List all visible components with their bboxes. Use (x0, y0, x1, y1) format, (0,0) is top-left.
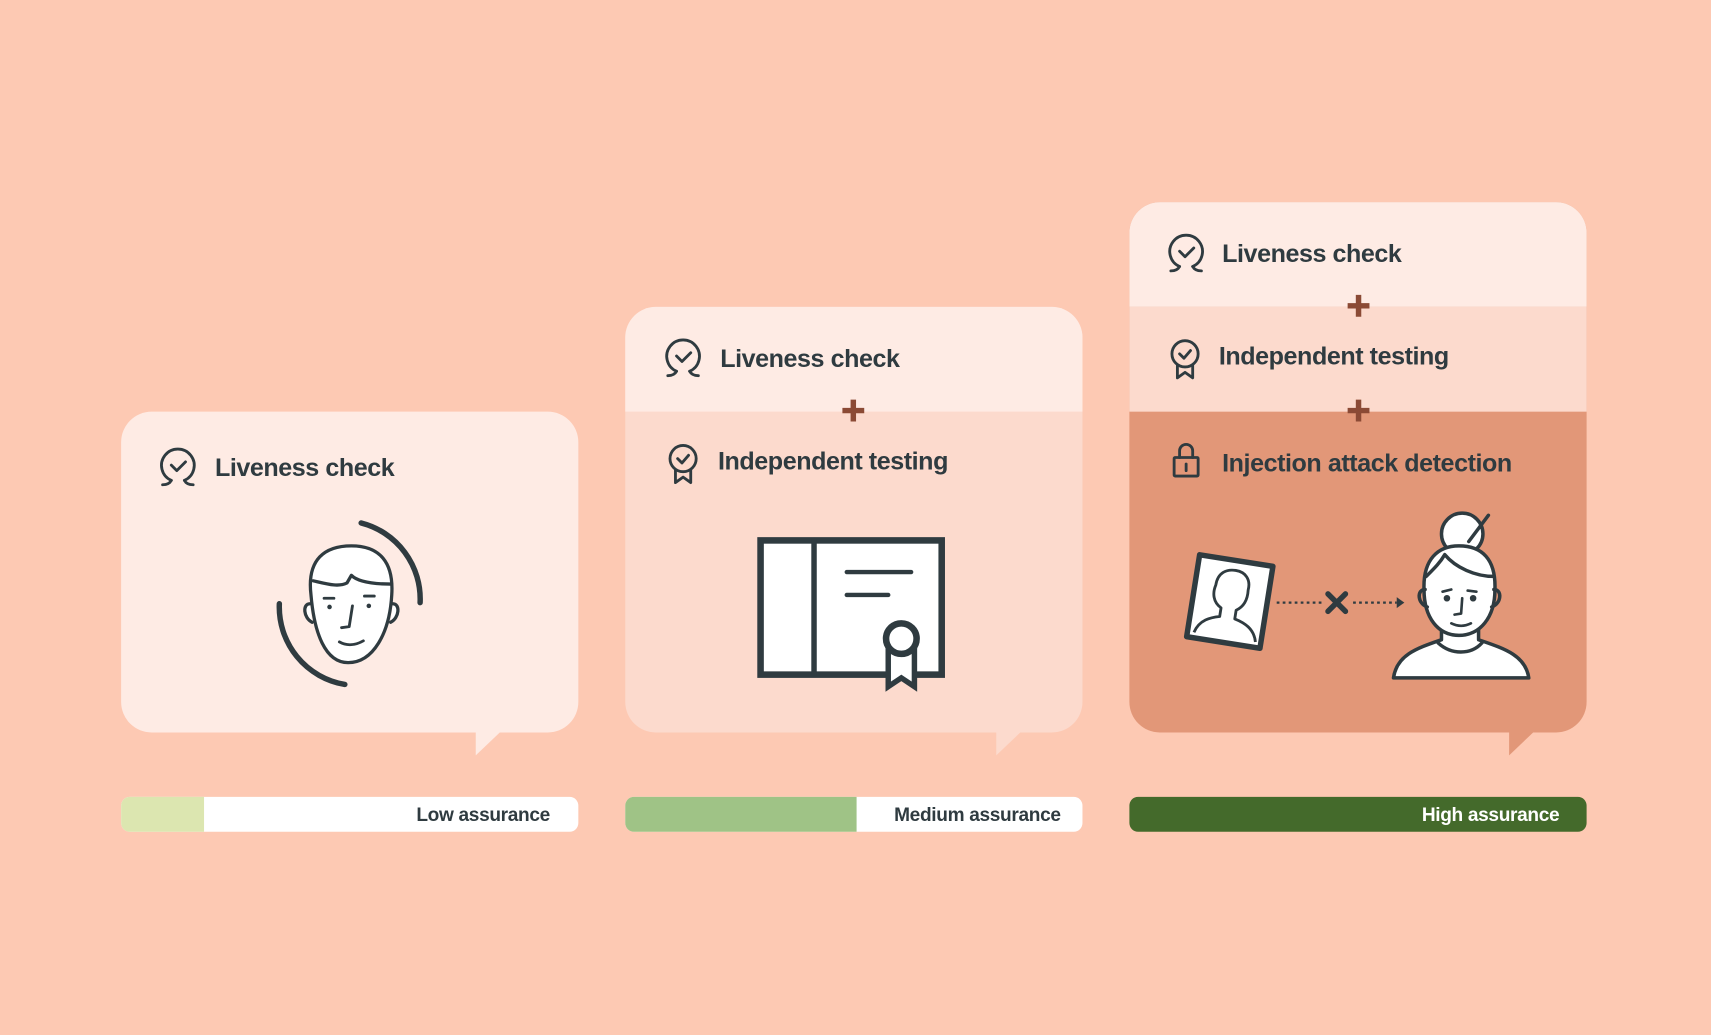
bar: high assurance (1129, 797, 1587, 832)
panel: high assurance (1129, 202, 1587, 755)
bar: high assurance: High assurance (1422, 805, 1559, 826)
bar: low assurance (121, 797, 578, 832)
panel: medium assurance (625, 307, 1082, 755)
illustration: woman (1393, 513, 1529, 678)
heading: liveness check: Liveness check (1222, 240, 1402, 268)
heading: injection attack detection: Injection attack detection (1222, 450, 1512, 478)
plus sign (1348, 400, 1369, 421)
heading: liveness check: Liveness check (720, 345, 900, 373)
icon: liveness check (667, 340, 699, 376)
illustration: photo frame (1187, 555, 1273, 648)
icon: liveness check (1170, 235, 1203, 271)
plus sign (842, 400, 864, 421)
heading: liveness check: Liveness check (215, 454, 395, 482)
illustration: certificate (761, 540, 942, 687)
heading: independent testing: Independent testing (1219, 343, 1449, 371)
plus sign (1348, 295, 1369, 317)
panel: low assurance (121, 412, 578, 755)
icon: award (1172, 341, 1198, 378)
bar: medium assurance: Medium assurance (894, 805, 1061, 826)
icon: lock (1174, 444, 1198, 476)
arrow: blocked injection (1277, 594, 1404, 611)
illustration: face with motion arcs (279, 523, 420, 684)
heading: independent testing: Independent testing (718, 447, 948, 475)
bar: medium assurance (625, 797, 1082, 832)
icon: award (670, 445, 696, 483)
icon: liveness check (161, 449, 194, 485)
bar: low assurance: Low assurance (416, 805, 550, 826)
